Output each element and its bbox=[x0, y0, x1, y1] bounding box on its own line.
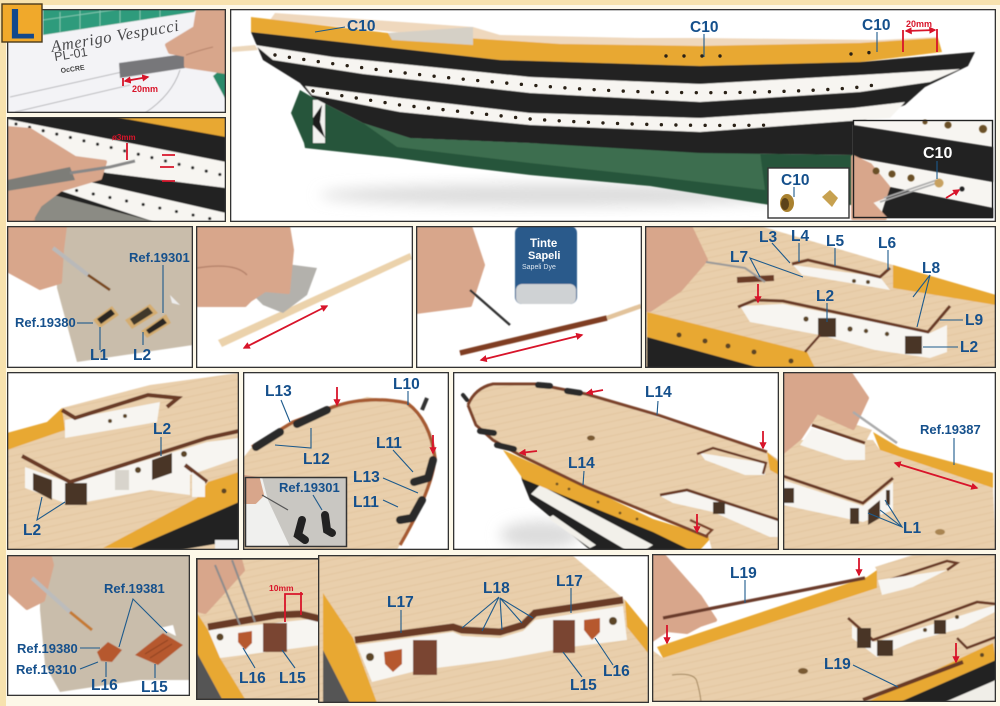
label Ref.19301: Ref.19301 bbox=[129, 250, 190, 265]
panel: deck house coamings L3–L9 bbox=[645, 226, 996, 368]
bottle label bbox=[522, 238, 560, 271]
measurement 3mm: ø3mm bbox=[112, 133, 136, 142]
frame bbox=[318, 556, 648, 702]
measurement 3mm bbox=[112, 133, 175, 181]
label L11 top: L11 bbox=[376, 435, 402, 452]
label L8 bbox=[913, 260, 940, 327]
red arrows bbox=[337, 387, 433, 453]
label L1 bbox=[90, 327, 108, 364]
label L2 upper: L2 bbox=[153, 421, 171, 438]
panel: fixing door and shield 10mm bbox=[196, 558, 318, 700]
label L11 lower bbox=[353, 494, 398, 511]
label L13 top: L13 bbox=[265, 383, 292, 400]
label C10 midship bbox=[690, 19, 718, 57]
label L15: L15 bbox=[279, 670, 306, 687]
frame bbox=[196, 226, 412, 368]
panel: stern bulkhead L15–L18 bbox=[318, 555, 649, 703]
label L19 lower: L19 bbox=[824, 656, 851, 673]
measurement 20mm: 20mm bbox=[132, 84, 158, 94]
label L10 bbox=[393, 376, 420, 405]
panel: hull with eyelets bbox=[230, 9, 996, 222]
label L7: L7 bbox=[730, 249, 748, 266]
frame bbox=[652, 554, 996, 702]
label L17 left: L17 bbox=[387, 594, 414, 611]
panel: template and 20mm mark bbox=[7, 9, 226, 113]
label L12 bbox=[275, 428, 330, 468]
frame bbox=[197, 559, 321, 699]
model name on template: Amerigo Vespucci bbox=[49, 16, 181, 56]
bottle label: Sapeli bbox=[528, 250, 560, 262]
red arrows bbox=[667, 558, 956, 662]
measurement 20mm on hull bbox=[903, 19, 937, 52]
label L6 bbox=[878, 235, 896, 270]
label L18 bbox=[462, 580, 533, 631]
arrow down bbox=[757, 284, 759, 302]
frame bbox=[784, 372, 996, 550]
label Ref.19380: Ref.19380 bbox=[15, 315, 76, 330]
inset: inserting eyelet bbox=[853, 120, 993, 218]
label L11 lower: L11 bbox=[353, 494, 379, 511]
double arrow bbox=[895, 463, 977, 488]
label L2: L2 bbox=[133, 347, 151, 364]
label L17 left bbox=[387, 594, 414, 633]
label L4 bbox=[791, 228, 809, 262]
panel: sanding strip bbox=[196, 226, 413, 368]
frame bbox=[8, 372, 238, 550]
frame bbox=[646, 226, 996, 368]
label L12: L12 bbox=[303, 451, 330, 468]
panel: painting windows bbox=[7, 226, 193, 368]
label L17 right bbox=[556, 573, 583, 613]
label L5: L5 bbox=[826, 233, 844, 250]
label L2 right: L2 bbox=[960, 339, 978, 356]
inset: painting cleats bbox=[245, 477, 347, 547]
measurement 20mm bbox=[123, 77, 158, 94]
label L2 right bbox=[923, 339, 978, 356]
label L19 upper: L19 bbox=[730, 565, 757, 582]
panel: staining strip with Sapeli dye bbox=[416, 226, 642, 368]
double arrow bbox=[244, 306, 327, 348]
label L16 bbox=[91, 662, 118, 694]
label L8: L8 bbox=[922, 260, 940, 277]
label L13 lower bbox=[353, 469, 418, 493]
bottle label: Tinte bbox=[530, 238, 557, 250]
portholes bbox=[275, 52, 880, 125]
label L14 top bbox=[645, 384, 672, 415]
label L19 lower bbox=[824, 656, 898, 687]
label L1: L1 bbox=[90, 347, 108, 364]
frame bbox=[244, 372, 448, 550]
label L2 bbox=[133, 332, 151, 364]
label L14 side bbox=[568, 455, 595, 485]
label L15: L15 bbox=[141, 679, 168, 696]
panel: stern rails L19 bbox=[652, 554, 996, 702]
label L13 top bbox=[265, 383, 292, 422]
label C10 bow bbox=[862, 17, 890, 52]
label L19 upper bbox=[730, 565, 757, 603]
panel: deck side rails L14 bbox=[453, 372, 779, 550]
measurement 20mm on hull: 20mm bbox=[906, 19, 932, 29]
label C10 midship: C10 bbox=[690, 19, 718, 36]
label L3: L3 bbox=[759, 229, 777, 246]
label L10: L10 bbox=[393, 376, 420, 393]
label L2 top bbox=[816, 288, 834, 322]
label L14 side: L14 bbox=[568, 455, 595, 472]
label L5 bbox=[826, 233, 844, 266]
step badge L bbox=[2, 0, 42, 48]
red arrows bbox=[520, 390, 763, 532]
measurement 10mm bbox=[269, 583, 303, 622]
label Ref.19381: Ref.19381 bbox=[104, 581, 165, 596]
label L16 bbox=[239, 648, 266, 687]
label L11 top bbox=[376, 435, 413, 472]
label L18: L18 bbox=[483, 580, 510, 597]
label C10 bow: C10 bbox=[862, 17, 890, 34]
label Ref.19381 bbox=[104, 581, 167, 647]
frame bbox=[8, 118, 226, 222]
label L16: L16 bbox=[91, 677, 118, 694]
label Ref.19387: Ref.19387 bbox=[920, 422, 981, 437]
step badge L: L bbox=[9, 0, 35, 48]
inset: inserting eyelet: C10 bbox=[923, 145, 952, 162]
label L15 bbox=[563, 652, 597, 694]
inset: eyelet detail bbox=[768, 168, 849, 218]
label L17 right: L17 bbox=[556, 573, 583, 590]
label C10 stern bbox=[315, 18, 375, 35]
panel: bow rail and cleats L10–L13 bbox=[243, 372, 449, 550]
label L14 top: L14 bbox=[645, 384, 672, 401]
inset: eyelet detail: C10 bbox=[781, 172, 809, 189]
label C10 stern: C10 bbox=[347, 18, 375, 35]
label L15 bbox=[141, 664, 168, 696]
frame bbox=[416, 226, 642, 368]
inset: painting cleats: Ref.19301 bbox=[279, 480, 340, 495]
hull shadow bbox=[320, 184, 800, 206]
panel: placing deck house Ref.19387 bbox=[783, 372, 996, 550]
label L3 bbox=[759, 229, 790, 263]
frame bbox=[8, 10, 226, 112]
plan number: PL-01 bbox=[53, 45, 88, 64]
panel: deck house detail L2 bbox=[7, 372, 239, 550]
label L16: L16 bbox=[603, 663, 630, 680]
label Ref.19380: Ref.19380 bbox=[17, 641, 78, 656]
label L1: L1 bbox=[903, 520, 921, 537]
label L1 bbox=[868, 500, 921, 537]
label L6: L6 bbox=[878, 235, 896, 252]
measurement 10mm: 10mm bbox=[269, 583, 294, 593]
label L4: L4 bbox=[791, 228, 809, 245]
label L13 lower: L13 bbox=[353, 469, 380, 486]
frame bbox=[8, 556, 190, 696]
label L15 bbox=[279, 650, 306, 687]
hull drawing bbox=[232, 13, 975, 205]
label L15: L15 bbox=[570, 677, 597, 694]
label L16: L16 bbox=[239, 670, 266, 687]
panel: drilling holes bbox=[7, 117, 226, 222]
double arrow bbox=[481, 335, 582, 360]
label L2 lower: L2 bbox=[23, 522, 41, 539]
maker logo: OcCRE bbox=[60, 65, 85, 75]
label L9: L9 bbox=[965, 312, 983, 329]
label Ref.19301 bbox=[129, 250, 190, 313]
bottle label: Sapeli Dye bbox=[522, 264, 556, 271]
panel: painting door and shield bbox=[7, 555, 190, 696]
label L7 bbox=[730, 249, 803, 277]
label Ref.19310: Ref.19310 bbox=[16, 662, 77, 677]
frame bbox=[8, 226, 192, 368]
frame bbox=[230, 10, 996, 222]
label L16 bbox=[595, 638, 630, 680]
label L2 upper bbox=[153, 421, 171, 456]
label L9 bbox=[940, 312, 983, 329]
frame bbox=[454, 372, 778, 550]
label L2 top: L2 bbox=[816, 288, 834, 305]
label L2 lower bbox=[23, 497, 65, 539]
label Ref.19387 bbox=[920, 422, 981, 465]
